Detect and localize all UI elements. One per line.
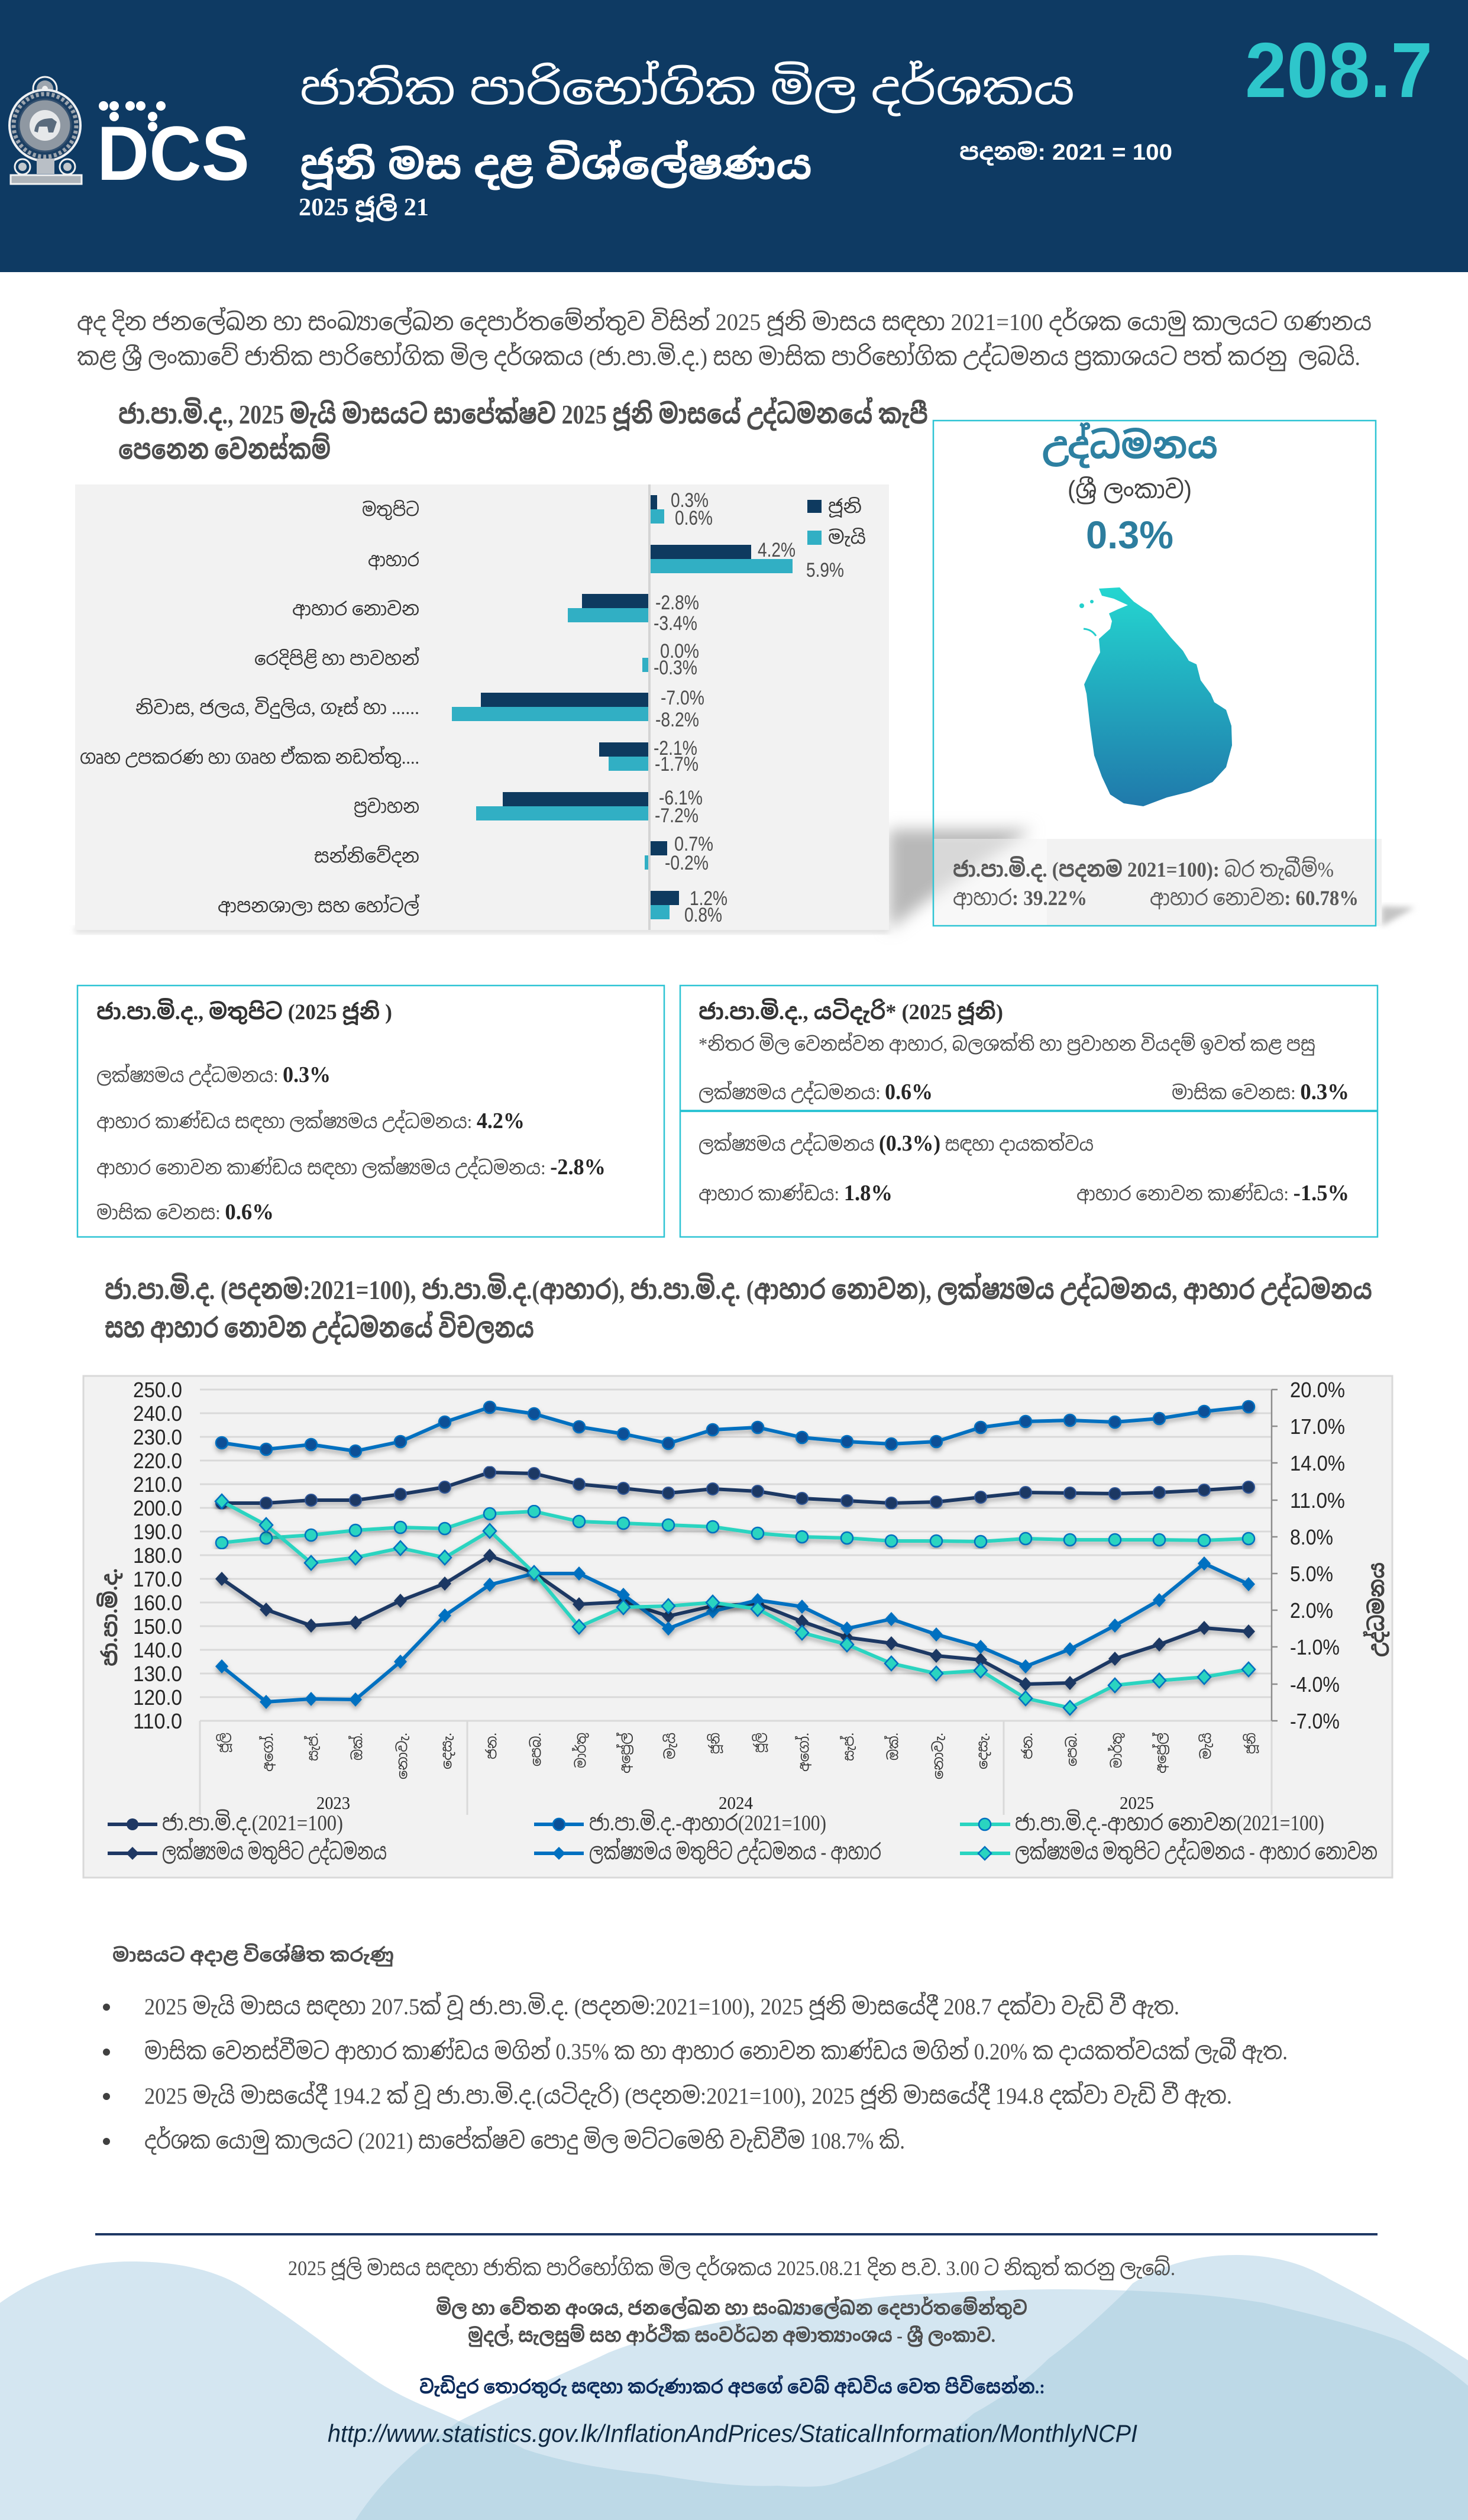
footer text: වැඩිදුර තොරතුරු සඳහා කරුණාකර අපගේ වෙබ් අඩවිය වෙත පිවිසෙන්න.: — [419, 2374, 1045, 2399]
panel: inflation card — [933, 421, 1382, 926]
value labels: 0.0% — [660, 640, 699, 663]
weights note: ජා.පා.මි.ද. (පදනම 2021=100): බර තැබීම්% — [953, 855, 1334, 883]
headline metrics: මාසික වෙනස: 0.6% — [96, 1200, 274, 1225]
month labels: සැප්. — [839, 1733, 857, 1761]
weights note — [953, 855, 1359, 910]
intro text: අද දින ජනලේඛන හා සංඛ්‍යාලේඛන දෙපාර්තමේන්තුව විසින් 2025 ජූනි මාසය සඳහා 2021=100 දර්ශක යොමු කාලයට ගණනය — [77, 306, 1372, 336]
series: CCPI non-food — [222, 1511, 1249, 1543]
bars: June and May by category — [452, 495, 793, 919]
month labels: ජන. — [1020, 1733, 1036, 1759]
month labels: දෙසැ. — [439, 1733, 455, 1769]
category labels: රෙදිපිළි හා පාවහන් — [254, 647, 419, 670]
month labels: ඔක්. — [883, 1733, 901, 1760]
category labels: මතුපිට — [362, 499, 419, 520]
axis line — [648, 484, 651, 930]
panel: CCPI headline — [77, 986, 664, 1237]
month labels: අගෝ. — [794, 1733, 812, 1772]
value labels: -8.2% — [655, 709, 699, 731]
contribution: ආහාර කාණ්ඩය: 1.8% — [699, 1181, 893, 1206]
value labels: -3.4% — [654, 612, 697, 635]
weights note: ආහාර නොවන: 60.78% — [1150, 886, 1359, 910]
category labels: ආහාර නොවන — [292, 599, 419, 619]
value labels: 0.3% — [671, 489, 709, 512]
series: CCPI food — [222, 1407, 1249, 1451]
background waves — [0, 2255, 1468, 2520]
chart legend: ජා.පා.මි.ද.(2021=100) — [162, 1809, 343, 1836]
contribution — [699, 1131, 1349, 1206]
headline index value: 208.7 — [1245, 27, 1433, 114]
value labels: -7.2% — [655, 805, 699, 827]
bar chart panel — [75, 484, 889, 930]
legend: මැයි — [828, 527, 866, 548]
key points list: මාසික වෙනස්වීමට ආහාර කාණ්ඩය මගින් 0.35% ක හා ආහාර නොවන කාණ්ඩය මගින් 0.20% ක දායකත්වයක් ලැබී ඇත. — [144, 2036, 1288, 2065]
key points list: 2025 මැයි මාසයේදී 194.2 ක් වූ ජා.පා.මි.ද.(යටිදැරි) (පදනම:2021=100), 2025 ජූනි මාසයේදී 194.8 දක්වා වැඩි වී ඇත. — [144, 2080, 1232, 2109]
month labels: මාර්තු — [1107, 1733, 1125, 1768]
right axis labels: 14.0% — [1290, 1451, 1345, 1475]
weights note: ආහාර: 39.22% — [953, 886, 1087, 910]
date: 2025 ජූලි 21 — [299, 193, 429, 222]
value labels: 4.2% — [758, 539, 796, 561]
month labels: ජූනි — [1243, 1733, 1259, 1754]
series: YoY non-food inflation — [222, 1501, 1249, 1708]
month labels: ජූනි — [707, 1733, 723, 1754]
left axis labels: 180.0 — [133, 1543, 182, 1568]
footer text: මුදල්, සැලසුම් සහ ආර්ථික සංවර්ධන අමාත්‍යාංශය - ශ්‍රී ලංකාව. — [468, 2323, 995, 2347]
right axis labels — [1290, 1378, 1345, 1733]
left axis labels: 110.0 — [133, 1709, 182, 1733]
right axis labels: 5.0% — [1290, 1562, 1333, 1586]
category labels: නිවාස, ජලය, විදුලිය, ගෑස් හා ...... — [135, 696, 419, 719]
chart legend: ලක්ෂ්‍යමය මතුපිට උද්ධමනය — [162, 1837, 387, 1865]
year labels — [316, 1792, 1154, 1813]
left axis labels: 140.0 — [133, 1638, 182, 1662]
footer rule — [95, 2233, 1378, 2235]
legend: ජූනි — [828, 496, 862, 518]
series: YoY headline inflation — [222, 1556, 1249, 1684]
month labels — [216, 1732, 1259, 1779]
subheading: Sri Lanka: (ශ්‍රී ලංකාව) — [1068, 476, 1192, 504]
value labels: -6.1% — [659, 787, 703, 809]
subtitle: ජූනි මස දළ විශ්ලේෂණය — [300, 140, 812, 190]
bar chart heading: ජා.පා.මි.ද., 2025 මැයි මාසයට සාපේක්ෂව 2025 ජූනි මාසයේ උද්ධමනයේ කැපී — [118, 396, 928, 431]
year labels: 2024 — [719, 1792, 753, 1813]
year labels: 2023 — [316, 1792, 350, 1813]
heading: ජා.පා.මි.ද., යටිදැරි* (2025 ජූනි) — [699, 997, 1003, 1025]
contribution: ආහාර නොවන කාණ්ඩය: -1.5% — [1076, 1181, 1349, 1206]
right axis labels: 2.0% — [1290, 1598, 1333, 1623]
key points heading: මාසයට අදාළ විශේෂිත කරුණු — [112, 1943, 394, 1967]
footer text — [288, 2255, 1175, 2447]
right axis labels: 20.0% — [1290, 1378, 1345, 1402]
left axis labels: 160.0 — [133, 1591, 182, 1615]
headline metrics: ආහාර නොවන කාණ්ඩය සඳහා ලක්ෂ්‍යමය උද්ධමනය: -2.8% — [96, 1155, 606, 1180]
right axis labels: 11.0% — [1290, 1488, 1345, 1513]
right axis labels: -7.0% — [1290, 1709, 1340, 1733]
series: CCPI — [222, 1472, 1249, 1503]
right axis labels: -4.0% — [1290, 1672, 1340, 1697]
value labels — [654, 489, 844, 926]
intro text — [77, 306, 1372, 371]
left axis labels: 210.0 — [133, 1472, 182, 1497]
left axis labels — [133, 1378, 182, 1733]
value labels: -7.0% — [661, 687, 704, 709]
month labels: මැයි — [1198, 1733, 1214, 1759]
chart legend: ජා.පා.මි.ද.-ආහාර(2021=100) — [589, 1809, 826, 1836]
heading: inflation: උද්ධමනය — [1042, 422, 1218, 469]
intro text: කළ ශ්‍රී ලංකාවේ ජාතික පාරිභෝගික මිල දර්ශකය (ජා.පා.මි.ද.) සහ මාසික පාරිභෝගික උද්ධමනය ප්‍රකාශයට පත් කරනු ලබයි. — [77, 341, 1360, 371]
category labels: ප්‍රවාහන — [354, 796, 419, 818]
left axis title: ජා.පා.මි.ද. — [96, 1568, 123, 1666]
month labels: ජූලි — [752, 1733, 768, 1753]
left axis labels: 220.0 — [133, 1449, 182, 1473]
icon: national emblem — [9, 77, 82, 184]
chart legend: ලක්ෂ්‍යමය මතුපිට උද්ධමනය - ආහාර නොවන — [1015, 1837, 1378, 1865]
category labels — [80, 499, 420, 916]
value labels: -1.7% — [655, 753, 699, 776]
year labels: 2025 — [1120, 1792, 1154, 1813]
left axis labels: 130.0 — [133, 1662, 182, 1686]
contribution: ලක්ෂ්‍යමය උද්ධමනය (0.3%) සඳහා දායකත්වය — [699, 1131, 1094, 1156]
core metrics — [699, 1080, 1349, 1104]
right axis labels: 8.0% — [1290, 1525, 1333, 1549]
month labels: අප්‍රේල් — [615, 1732, 633, 1773]
right axis labels: -1.0% — [1290, 1635, 1340, 1659]
map: Sri Lanka — [1079, 587, 1232, 806]
footer text: http://www.statistics.gov.lk/InflationAndPrices/StaticalInformation/MonthlyNCPI — [328, 2419, 1137, 2447]
headline metrics — [96, 1062, 606, 1225]
month labels: අප්‍රේල් — [1151, 1732, 1169, 1773]
header banner — [0, 0, 1468, 272]
month labels: සැප්. — [303, 1733, 321, 1761]
headline metrics: ආහාර කාණ්ඩය සඳහා ලක්ෂ්‍යමය උද්ධමනය: 4.2% — [96, 1109, 525, 1133]
value labels: 0.7% — [674, 833, 713, 855]
left axis labels: 150.0 — [133, 1614, 182, 1639]
value labels: -0.3% — [654, 657, 697, 679]
panel: CCPI core — [680, 986, 1378, 1237]
chart legend: ජා.පා.මි.ද.-ආහාර නොවන(2021=100) — [1015, 1809, 1324, 1836]
core metrics: ලක්ෂ්‍යමය උද්ධමනය: 0.6% — [699, 1080, 933, 1104]
month labels: පෙබ. — [1065, 1733, 1080, 1766]
value labels: -0.2% — [665, 852, 709, 874]
line chart panel — [83, 1376, 1392, 1878]
bar chart heading: පෙනෙන වෙනස්කම් — [118, 432, 331, 465]
value labels: -2.1% — [654, 737, 697, 760]
panel shadows — [75, 829, 1415, 933]
category labels: සන්නිවේදන — [314, 844, 419, 867]
line chart heading: සහ ආහාර නොවන උද්ධමනයේ විචලනය — [105, 1310, 534, 1345]
month labels: ජූලි — [216, 1733, 232, 1753]
bar chart heading — [118, 396, 928, 465]
value labels: -2.8% — [655, 592, 699, 614]
month labels: ඔක්. — [347, 1733, 366, 1760]
footer text: 2025 ජූලි මාසය සඳහා ජාතික පාරිභෝගික මිල දර්ශකය 2025.08.21 දින ප.ව. 3.00 ට නිකුත් කරනු ලැබේ. — [288, 2255, 1175, 2280]
category labels: ආහාර — [368, 550, 419, 570]
note: *නිතර මිල වෙනස්වන ආහාර, බලශක්ති හා ප්‍රවාහන වියදම් ඉවත් කළ පසු — [699, 1032, 1315, 1055]
series: YoY food inflation — [222, 1563, 1249, 1702]
category labels: ගෘහ උපකරණ හා ගෘහ ඒකක නඩත්තු.... — [80, 745, 419, 768]
value labels: 0.6% — [675, 507, 713, 529]
title: ජාතික පාරිභෝගික මිල දර්ශකය — [300, 60, 1075, 117]
headline metrics: ලක්ෂ්‍යමය උද්ධමනය: 0.3% — [96, 1062, 331, 1087]
month labels: පෙබ. — [529, 1733, 544, 1766]
key points list: 2025 මැයි මාසය සඳහා 207.5ක් වූ ජා.පා.මි.ද. (පදනම:2021=100), 2025 ජූනි මාසයේදී 208.7 දක්වා වැඩි වී ඇත. — [144, 1991, 1179, 2020]
month labels: නොවැ. — [931, 1733, 946, 1779]
left axis labels: 190.0 — [133, 1520, 182, 1544]
left axis labels: 200.0 — [133, 1496, 182, 1520]
inflation value: 0.3% — [1086, 513, 1173, 557]
month labels: නොවැ. — [395, 1733, 410, 1779]
footer text: මිල හා වේතන අංශය, ජනලේඛන හා සංඛ්‍යාලේඛන දෙපාර්තමේන්තුව — [436, 2296, 1027, 2320]
key points list — [103, 1991, 1288, 2154]
month labels: මාර්තු — [571, 1733, 589, 1768]
left axis labels: 240.0 — [133, 1401, 182, 1426]
left axis labels: 170.0 — [133, 1567, 182, 1591]
logo: DCS: DCS — [97, 110, 250, 196]
key points list: දර්ශක යොමු කාලයට (2021) සාපේක්ෂව පොදු මිල මට්ටමෙහි වැඩිවීම 108.7% කි. — [144, 2125, 905, 2154]
month labels: මැයි — [662, 1733, 678, 1759]
month labels: දෙසැ. — [975, 1733, 991, 1769]
heading: ජා.පා.මි.ද., මතුපිට (2025 ජූනි ) — [96, 997, 392, 1025]
value labels: 5.9% — [806, 559, 844, 581]
line chart heading — [105, 1272, 1372, 1345]
category labels: ආපනශාලා සහ හෝටල් — [218, 894, 420, 916]
gridlines and axes — [200, 1390, 1272, 1815]
legend — [807, 496, 866, 548]
month labels: අගෝ. — [258, 1733, 276, 1772]
core metrics: මාසික වෙනස: 0.3% — [1172, 1080, 1349, 1104]
value labels: 1.2% — [690, 887, 727, 910]
base year: පදනම: 2021 = 100 — [959, 140, 1172, 166]
value labels: 0.8% — [684, 904, 722, 926]
right axis labels: 17.0% — [1290, 1414, 1345, 1439]
left axis labels: 120.0 — [133, 1685, 182, 1710]
left axis labels: 230.0 — [133, 1425, 182, 1449]
chart legend: ලක්ෂ්‍යමය මතුපිට උද්ධමනය - ආහාර — [589, 1837, 881, 1865]
right axis title: උද්ධමනය — [1363, 1562, 1390, 1657]
left axis labels: 250.0 — [133, 1378, 182, 1402]
month labels: ජන. — [484, 1733, 500, 1759]
chart legend — [108, 1809, 1378, 1865]
